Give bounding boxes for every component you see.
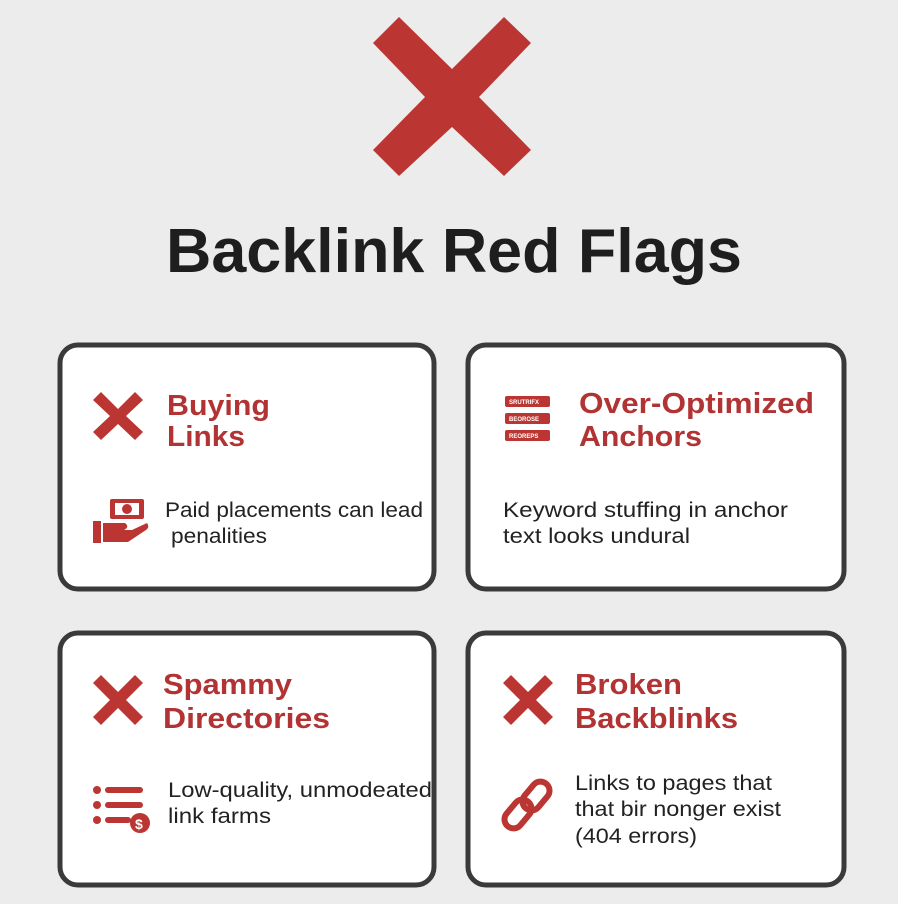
icon: list with dollar [93, 786, 150, 833]
body text: text looks undural [503, 524, 690, 548]
heading: Spammy [163, 669, 292, 701]
panel: over-optimized anchors [468, 345, 844, 589]
heading: Broken [575, 669, 682, 701]
icon: hand with money [93, 499, 148, 543]
body text: penalities [171, 524, 267, 548]
icon: anchor tags: REOREPS [509, 434, 538, 440]
heading: Links [167, 421, 245, 453]
panel: buying links [60, 345, 434, 589]
icon: x [503, 675, 553, 725]
body text: Keyword stuffing in anchor [503, 498, 788, 522]
panel: broken backlinks [468, 633, 844, 885]
heading: Backblinks [575, 703, 738, 735]
icon: x [93, 392, 143, 440]
title: Backlink Red Flags [166, 217, 742, 286]
icon: x [93, 675, 143, 725]
body text: Low-quality, unmodeated [168, 778, 432, 802]
icon: anchor tags: BEOROSE [509, 417, 539, 423]
heading: Directories [163, 703, 330, 735]
heading: Buying [167, 390, 270, 422]
icon: anchor tags: SRUTRIFX [509, 400, 539, 406]
body text: link farms [168, 804, 271, 828]
body text: (404 errors) [575, 824, 697, 848]
body text: that bir nonger exist [575, 797, 781, 821]
panel: spammy directories [60, 633, 434, 885]
body text: Links to pages that [575, 771, 772, 795]
icon: anchor tags [505, 396, 550, 441]
icon: big red X [373, 17, 531, 176]
body text: Paid placements can lead [165, 498, 423, 522]
heading: Over-Optimized [579, 388, 814, 420]
icon: chain link [501, 778, 553, 832]
icon: list with dollar: $ [135, 816, 143, 832]
heading: Anchors [579, 421, 702, 453]
